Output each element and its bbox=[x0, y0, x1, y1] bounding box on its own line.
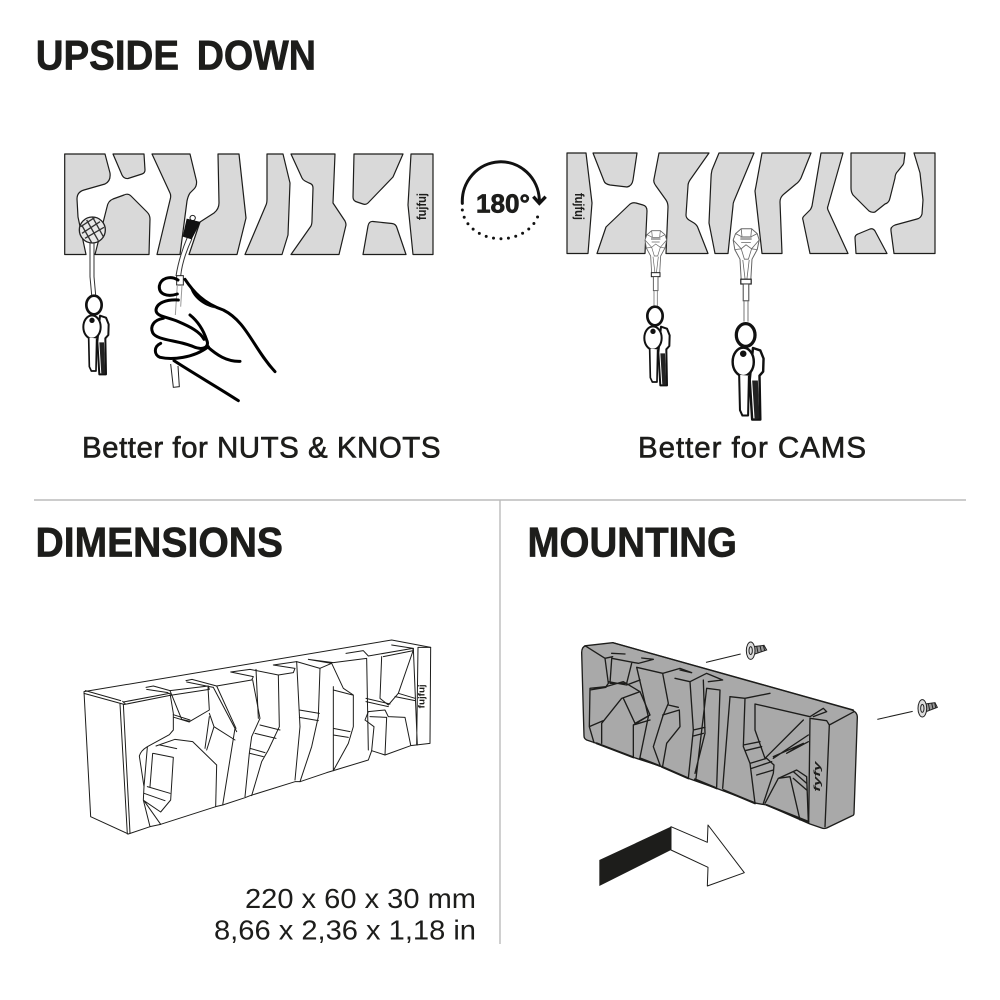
illustration: 3D holder rear with mounting bbox=[582, 642, 937, 886]
right holder bar: flipped view bbox=[567, 153, 935, 254]
illustration: small cam with keys bbox=[644, 231, 670, 385]
dimensions text bbox=[214, 883, 476, 945]
illustration: hand pulling sling bbox=[152, 215, 275, 401]
heading: mounting: MOUNTING bbox=[528, 519, 737, 566]
icon: rotate 180 degrees bbox=[462, 162, 546, 239]
dimensions text: 8,66 x 2,36 x 1,18 in bbox=[214, 914, 476, 945]
heading: dimensions: DIMENSIONS bbox=[36, 519, 283, 566]
logo: 3D rear: fyfy bbox=[812, 760, 822, 792]
illustration: large cam with keys bbox=[733, 229, 764, 420]
logo: right bar: fujfuj bbox=[572, 193, 587, 220]
title: upside down bbox=[36, 31, 316, 78]
dimensions text: 220 x 60 x 30 mm bbox=[245, 883, 476, 914]
caption: nuts and knots: Better for NUTS & KNOTS bbox=[82, 432, 440, 464]
logo: left bar: fujfuj bbox=[414, 193, 429, 220]
title: upside down: UPSIDE bbox=[36, 31, 179, 78]
caption: cams: Better for CAMS bbox=[638, 432, 866, 464]
icon: rotate 180 degrees: 180° bbox=[476, 189, 530, 219]
left holder bar: front view bbox=[65, 154, 433, 254]
title: upside down: DOWN bbox=[197, 31, 316, 78]
arrow: slide onto adhesive tape bbox=[599, 825, 744, 886]
illustration: 3D holder outline bbox=[84, 640, 431, 834]
icon: screw right bbox=[877, 700, 937, 719]
icon: screw left bbox=[706, 642, 767, 662]
logo: 3D holder: fujfuj bbox=[417, 684, 427, 708]
illustration: knot with keys bbox=[79, 217, 109, 374]
section dividers bbox=[34, 500, 966, 944]
